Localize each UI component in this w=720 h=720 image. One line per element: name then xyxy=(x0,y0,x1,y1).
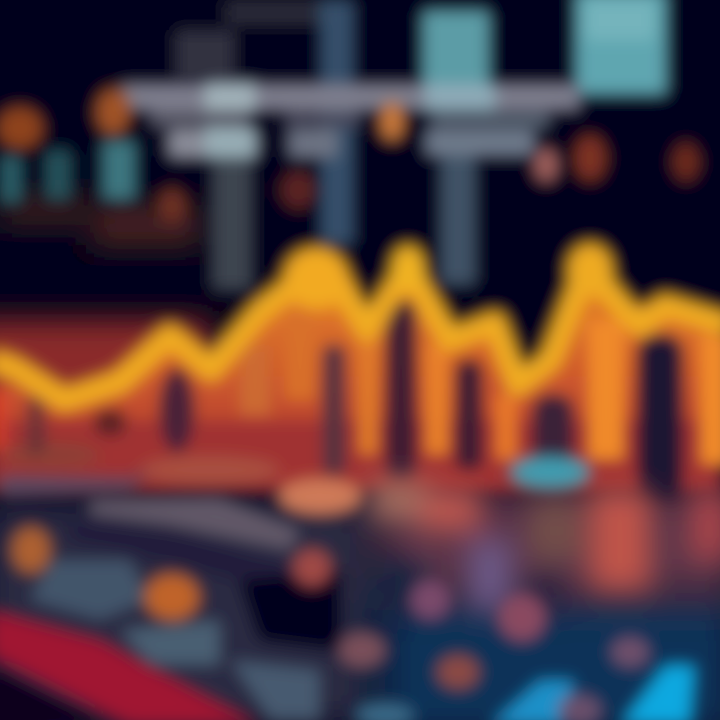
cyan callout xyxy=(510,456,590,488)
red diagonal strip xyxy=(0,610,260,720)
mottled lower right blocks xyxy=(370,480,720,610)
lower keyboard panel xyxy=(0,470,340,720)
heading: blurred title text xyxy=(120,82,580,158)
chart: orange bars xyxy=(240,290,720,465)
panel: grey and teal columns xyxy=(0,0,667,290)
blue lower right panel xyxy=(355,665,695,720)
orange buttons xyxy=(11,526,650,690)
chart: dark bars xyxy=(27,300,682,500)
chart: yellow line xyxy=(0,242,720,400)
orange highlights upper area xyxy=(0,88,700,223)
chart: area under line xyxy=(0,260,720,515)
